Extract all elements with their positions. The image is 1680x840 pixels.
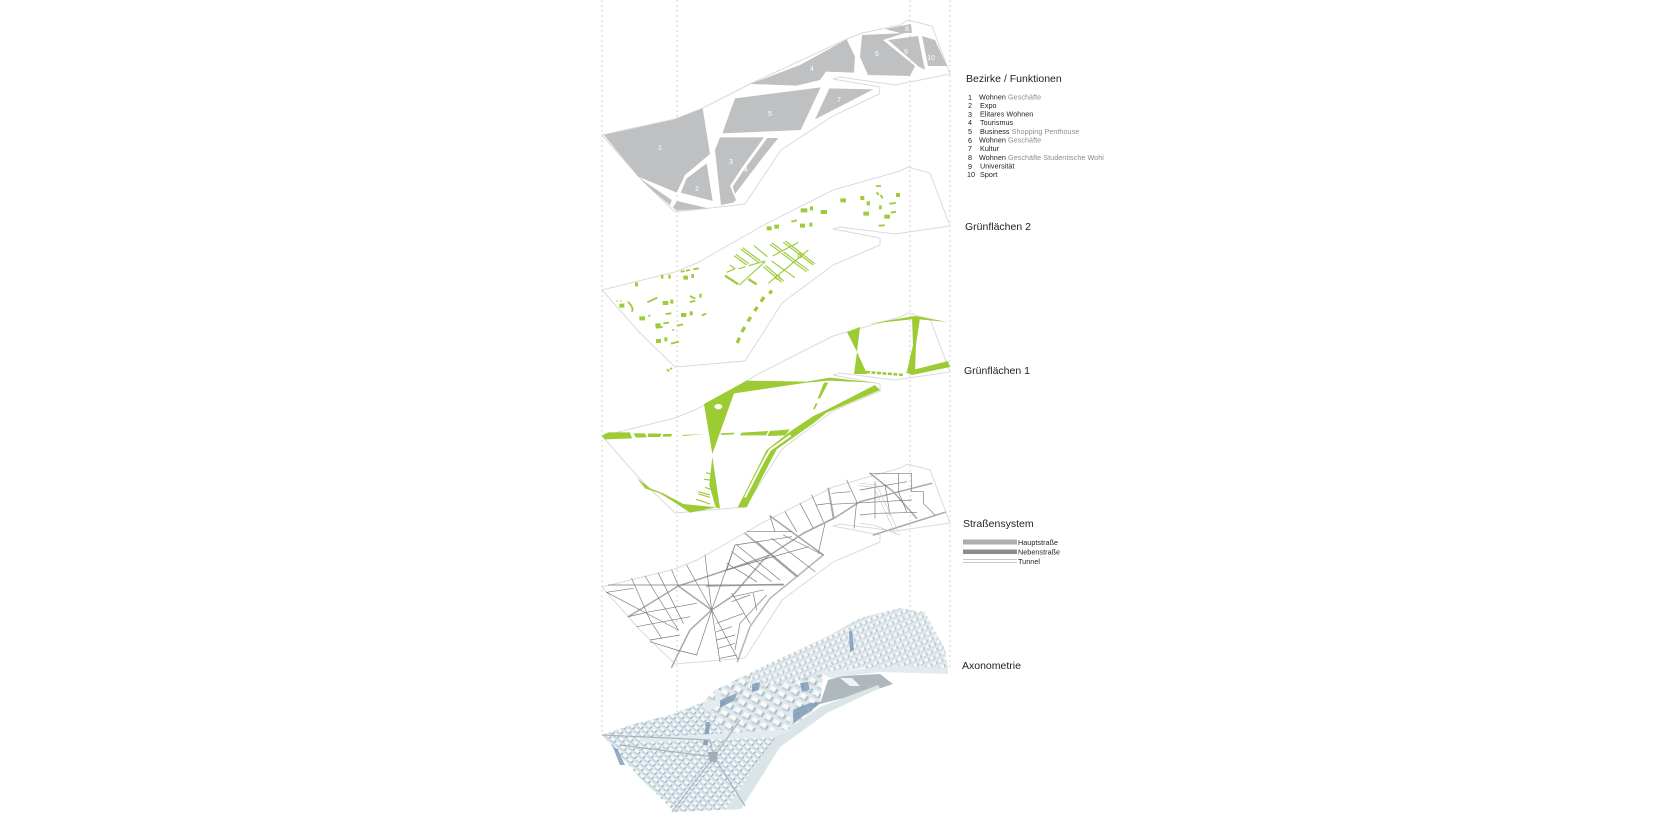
northern district (750, 608, 948, 688)
district numbers: 10 (927, 55, 935, 62)
layer: Axonometrie city model (602, 608, 948, 812)
side roads (607, 495, 830, 662)
legend: district functions: Kultur (980, 144, 1000, 153)
district numbers: 4 (810, 66, 814, 73)
legend: district functions (967, 92, 1104, 179)
dark blue shadow patches (612, 630, 854, 765)
legend: road types (963, 538, 1060, 566)
legend: district functions: Wohnen Geschäfte (979, 92, 1041, 102)
pale plazas and boulevards (640, 666, 948, 742)
district numbers: 8 (905, 26, 909, 33)
western fan district (602, 702, 792, 812)
east-west green band (602, 432, 632, 439)
layer: Grünflächen 2 map (602, 167, 950, 371)
main roads (628, 488, 833, 667)
lower spike and ticks (709, 457, 720, 508)
legend: district functions: Tourismus (980, 118, 1014, 127)
planted street grid (727, 241, 815, 285)
district numbers: 2 (695, 186, 699, 193)
district numbers: 7 (837, 97, 841, 104)
legend: district functions: Sport (980, 170, 997, 179)
south-west swoosh (637, 478, 717, 513)
legend: district functions: Elitares Wohnen (980, 110, 1033, 118)
riverside green strip (738, 385, 880, 507)
legend: district functions: 5 (968, 127, 972, 136)
legend: district functions: 9 (968, 162, 972, 171)
legend: district functions: 2 (968, 101, 972, 110)
legend: district functions: 3 (968, 110, 972, 119)
eastern road grid (803, 473, 945, 535)
small green plots (619, 195, 900, 341)
heading: Axonometrie: Axonometrie (962, 660, 1021, 672)
spine of diamond plots (737, 291, 772, 343)
layer: Grünflächen 1 map (602, 313, 950, 513)
district numbers: 4 (744, 167, 748, 174)
vertical dashed alignment guides (602, 0, 950, 735)
central triangular park (704, 378, 875, 454)
legend: district functions: Wohnen Geschäfte (979, 136, 1041, 144)
district numbers: 6 (875, 51, 879, 58)
legend: road types: Tunnel (1018, 557, 1040, 566)
legend: district functions: 6 (968, 136, 972, 145)
legend: district functions: 1 (968, 93, 972, 102)
legend: district functions: Expo (980, 101, 997, 110)
inner harbour (820, 674, 893, 704)
legend: road types: Hauptstraße (1018, 538, 1058, 547)
district numbers: 1 (658, 145, 662, 152)
layer: Bezirke / Funktionen map (602, 20, 950, 212)
legend: district functions: Universität (980, 162, 1015, 170)
legend: district functions: Wohnen Geschäfte Studentische Wohi (979, 153, 1104, 162)
northern bow-tie parks (847, 327, 867, 374)
legend: district functions: 4 (968, 118, 972, 127)
legend: district functions: 7 (968, 144, 972, 153)
central high-rise district (703, 645, 830, 740)
district numbers: 9 (904, 49, 908, 56)
legend: district functions: 10 (967, 170, 975, 179)
district numbers: 5 (768, 111, 772, 118)
district numbers (658, 26, 935, 193)
legend: district functions: Business Shopping Penthouse (980, 127, 1079, 136)
heading: Bezirke / Funktionen: Bezirke / Funktionen (966, 73, 1062, 85)
heading: Grünflächen 2: Grünflächen 2 (965, 221, 1031, 233)
layer: Straßensystem map (602, 464, 950, 667)
river embankment (725, 685, 880, 810)
heading: Straßensystem: Straßensystem (963, 518, 1034, 530)
district numbers: 3 (729, 159, 733, 166)
heading: Grünflächen 1: Grünflächen 1 (964, 365, 1030, 377)
legend: road types: Nebenstraße (1018, 548, 1060, 556)
legend: district functions: 8 (968, 153, 972, 162)
